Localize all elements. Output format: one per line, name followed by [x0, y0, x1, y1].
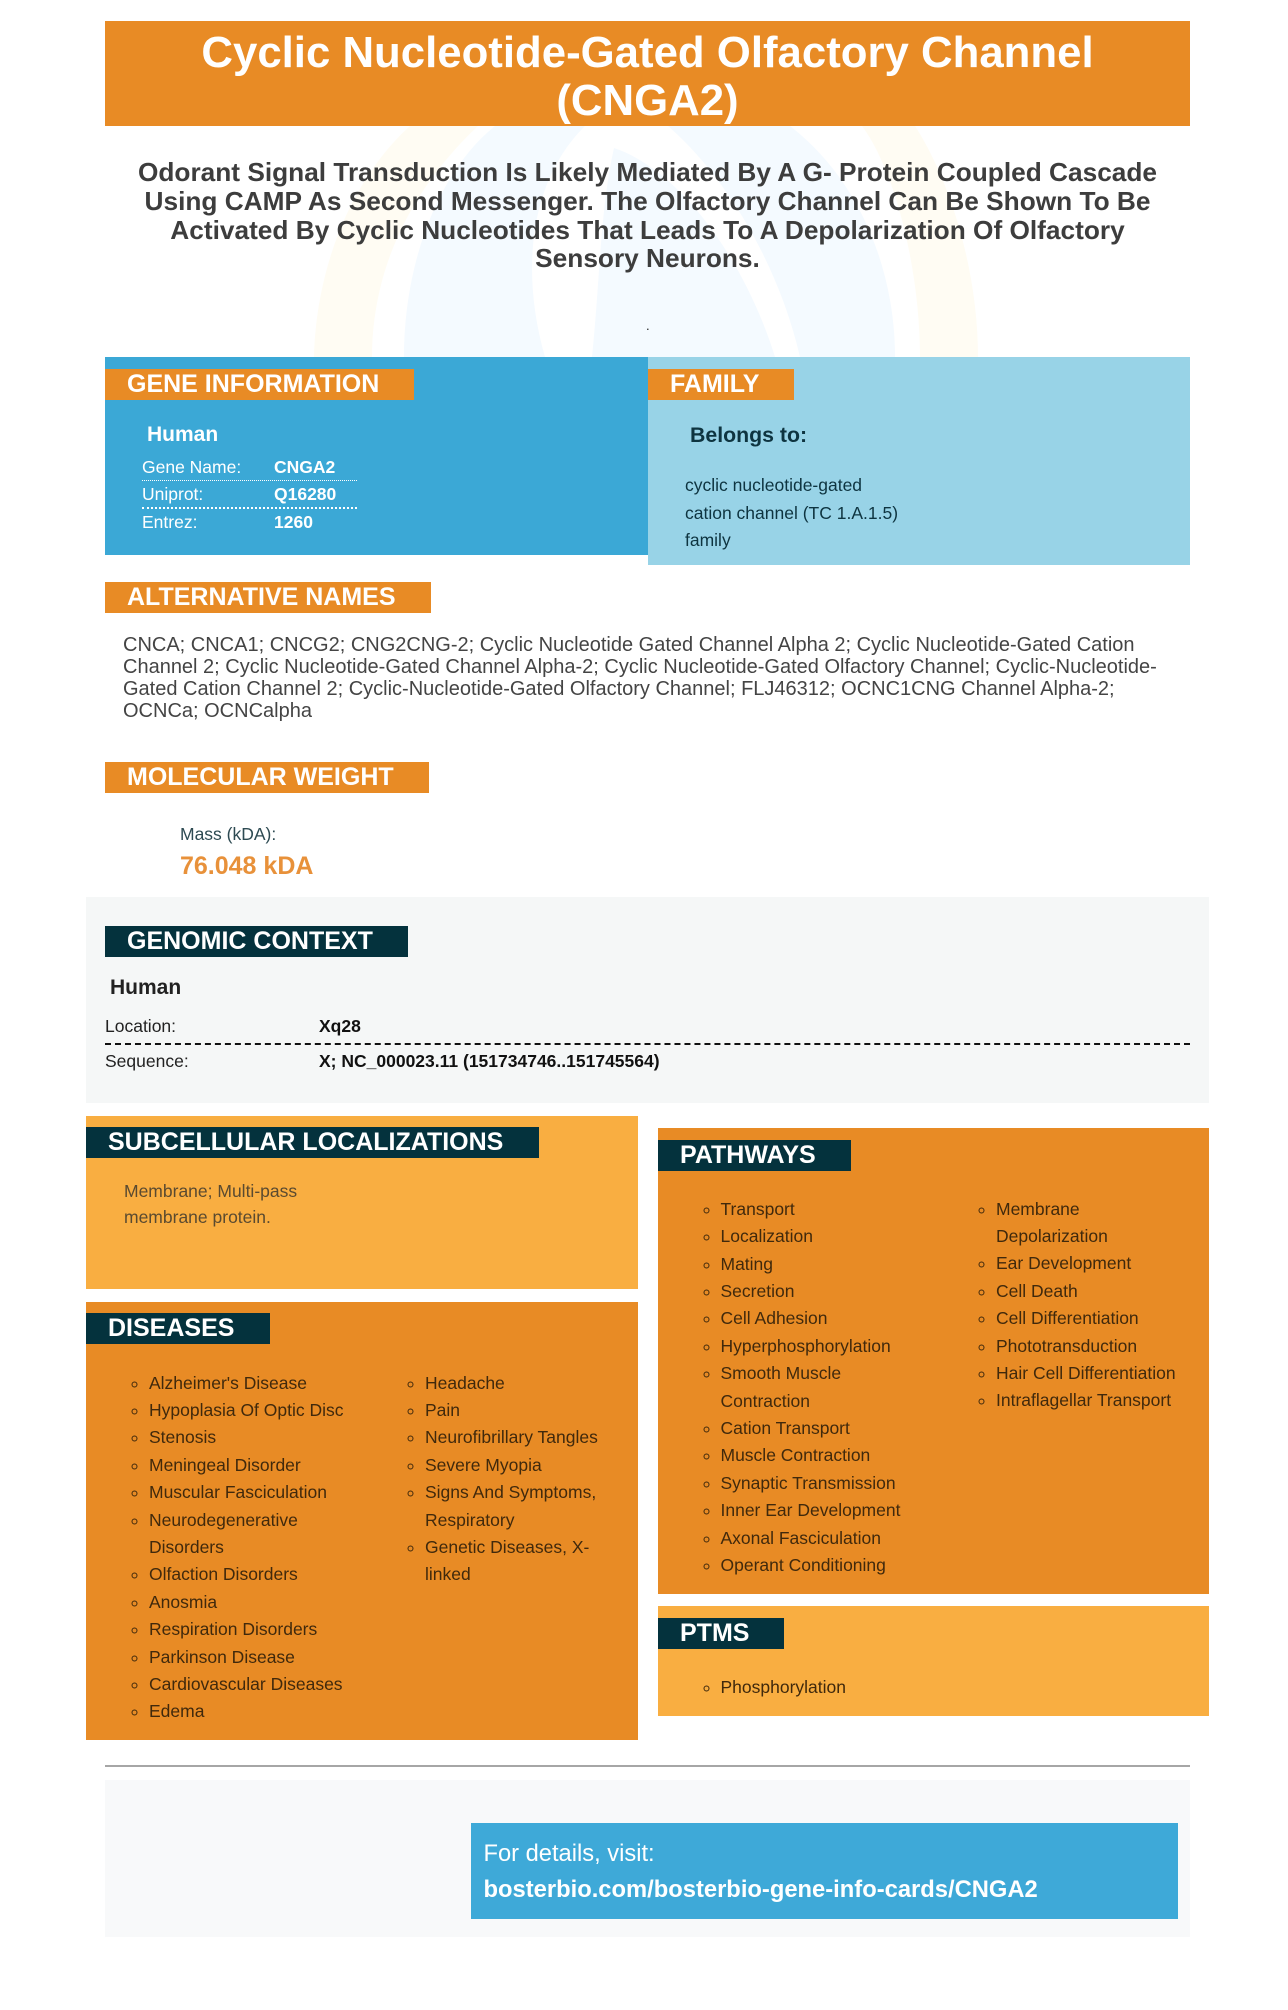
- disease list column 1: Hypoplasia Of Optic Disc: [149, 1400, 344, 1420]
- pathway list column 2: Cell Death: [996, 1281, 1078, 1301]
- panel: diseases: [86, 1302, 638, 1740]
- uniprot row: [142, 483, 357, 509]
- panel: footer: [105, 1780, 1190, 1937]
- family description: cyclic nucleotide-gated: [685, 475, 862, 495]
- alternative names text: OCNCa; OCNCalpha: [123, 700, 312, 722]
- localization text: Membrane; Multi-pass: [124, 1181, 297, 1201]
- pathway list column 1: Cation Transport: [720, 1418, 850, 1438]
- localization text: membrane protein.: [124, 1207, 271, 1227]
- title banner: (CNGA2): [556, 76, 739, 125]
- heading: pathways: PATHWAYS: [680, 1141, 816, 1169]
- subtitle summary: Using CAMP As Second Messenger. The Olfactory Channel Can Be Shown To Be: [145, 186, 1150, 216]
- pathway list column 2: Membrane: [996, 1198, 1080, 1218]
- panel: genomic context: [86, 897, 1209, 1103]
- sequence row: X; NC_000023.11 (151734746..151745564): [319, 1051, 660, 1071]
- footer divider: [105, 1765, 1190, 1767]
- alternative names text: CNCA; CNCA1; CNCG2; CNG2CNG-2; Cyclic Nucleotide Gated Channel Alpha 2; Cyclic Nucleotide-Gated Cation: [123, 634, 1135, 656]
- disease list column 1: Disorders: [149, 1537, 224, 1557]
- sequence row: Sequence:: [105, 1051, 189, 1071]
- pathway list column 1: [704, 1199, 900, 1575]
- subtitle summary: Sensory Neurons.: [535, 243, 760, 273]
- title banner: Cyclic Nucleotide-Gated Olfactory Channel: [201, 28, 1094, 77]
- details label: For details, visit:: [484, 1841, 655, 1867]
- heading: ptms: [658, 1618, 784, 1649]
- disease list column 1: Stenosis: [149, 1427, 216, 1447]
- heading: subcellular localizations: SUBCELLULAR LOCALIZATIONS: [108, 1128, 503, 1156]
- heading: molecular weight: MOLECULAR WEIGHT: [127, 763, 394, 791]
- disease list column 2: linked: [425, 1564, 471, 1584]
- heading: ptms: PTMS: [680, 1619, 749, 1647]
- family description: [685, 475, 898, 550]
- heading: genomic context: GENOMIC CONTEXT: [127, 927, 373, 955]
- alternative names text: Channel 2; Cyclic Nucleotide-Gated Channel Alpha-2; Cyclic Nucleotide-Gated Olfactory Channel; Cyclic-Nucleotide-: [123, 656, 1157, 678]
- alternative names text: Gated Cation Channel 2; Cyclic-Nucleotide-Gated Olfactory Channel; FLJ46312; OCNC1CNG Channel Alpha-2;: [123, 678, 1115, 700]
- family description: cation channel (TC 1.A.1.5): [685, 503, 898, 523]
- ptm list: Phosphorylation: [720, 1677, 846, 1697]
- subtitle summary: [138, 157, 1157, 273]
- subtitle summary: Activated By Cyclic Nucleotides That Leads To A Depolarization Of Olfactory: [170, 215, 1125, 245]
- disease list column 1: Parkinson Disease: [149, 1647, 295, 1667]
- pathway list column 2: Intraflagellar Transport: [996, 1390, 1171, 1410]
- pathway list column 2: Phototransduction: [996, 1336, 1137, 1356]
- pathway list column 1: Cell Adhesion: [720, 1308, 828, 1328]
- heading: diseases: DISEASES: [108, 1314, 234, 1342]
- location row: Location:: [105, 1016, 176, 1036]
- disease list column 1: Neurodegenerative: [149, 1510, 298, 1530]
- panel: pathways: [658, 1128, 1209, 1594]
- family description: family: [685, 530, 731, 550]
- callout: details link: [471, 1823, 1178, 1919]
- mass value: 76.048 kDA: [180, 852, 313, 880]
- gene name row: [142, 456, 357, 481]
- uniprot row: Uniprot:: [142, 484, 203, 504]
- disease list column 2: Respiratory: [425, 1510, 514, 1530]
- heading: alternative names: ALTERNATIVE NAMES: [127, 583, 396, 611]
- disease list column 2: Genetic Diseases, X-: [425, 1537, 589, 1557]
- disease list column 2: [408, 1372, 598, 1584]
- pathway list column 1: Inner Ear Development: [720, 1500, 900, 1520]
- disease list column 1: [132, 1372, 344, 1721]
- heading: gene information: GENE INFORMATION: [127, 370, 379, 398]
- pathway list column 1: Operant Conditioning: [720, 1555, 886, 1575]
- pathway list column 1: Synaptic Transmission: [720, 1473, 896, 1493]
- disease list column 1: Cardiovascular Diseases: [149, 1674, 343, 1694]
- heading: pathways: [658, 1140, 851, 1171]
- disease list column 2: Pain: [425, 1400, 460, 1420]
- disease list column 1: Meningeal Disorder: [149, 1455, 301, 1475]
- localization text: [124, 1181, 297, 1227]
- uniprot row: Q16280: [274, 484, 336, 504]
- dot: .: [646, 318, 650, 333]
- disease list column 2: Severe Myopia: [425, 1455, 542, 1475]
- heading: family: FAMILY: [670, 370, 759, 398]
- pathway list column 1: Mating: [720, 1254, 773, 1274]
- species label: Human: [147, 423, 218, 446]
- subtitle summary: Odorant Signal Transduction Is Likely Mediated By A G- Protein Coupled Cascade: [138, 157, 1157, 187]
- panel: subcellular localizations: [86, 1116, 638, 1289]
- heading: family: [648, 369, 794, 400]
- pathway list column 1: Localization: [720, 1226, 813, 1246]
- pathway list column 1: Secretion: [720, 1281, 794, 1301]
- belongs to label: Belongs to:: [690, 423, 807, 447]
- pathway list column 2: Cell Differentiation: [996, 1308, 1139, 1328]
- disease list column 1: Edema: [149, 1701, 204, 1721]
- disease list column 1: Anosmia: [149, 1592, 217, 1612]
- pathway list column 1: Contraction: [720, 1391, 810, 1411]
- sequence row: [105, 1051, 660, 1071]
- species label: Human: [110, 976, 181, 999]
- disease list column 1: Alzheimer's Disease: [149, 1372, 307, 1392]
- pathway list column 1: Muscle Contraction: [720, 1445, 870, 1465]
- disease list column 1: Olfaction Disorders: [149, 1564, 298, 1584]
- pathway list column 2: [978, 1198, 1176, 1410]
- mass label: Mass (kDA):: [180, 824, 276, 844]
- pathway list column 1: Axonal Fasciculation: [720, 1528, 881, 1548]
- pathway list column 1: Transport: [720, 1199, 795, 1219]
- panel: family: [648, 357, 1190, 565]
- title banner: [105, 21, 1190, 126]
- alternative names text: [123, 634, 1157, 722]
- disease list column 2: Headache: [425, 1372, 505, 1392]
- gene name row: CNGA2: [274, 457, 335, 477]
- pathway list column 1: Hyperphosphorylation: [720, 1336, 891, 1356]
- heading: diseases: [86, 1313, 270, 1344]
- disease list column 1: Muscular Fasciculation: [149, 1482, 327, 1502]
- disease list column 1: Respiration Disorders: [149, 1619, 317, 1639]
- details url: bosterbio.com/bosterbio-gene-info-cards/CNGA2: [484, 1876, 1038, 1903]
- entrez row: [142, 512, 313, 532]
- pathway list column 2: Hair Cell Differentiation: [996, 1363, 1176, 1383]
- panel: ptms: [658, 1606, 1209, 1716]
- panel: gene information: [105, 357, 648, 555]
- gene name row: Gene Name:: [142, 457, 241, 477]
- pathway list column 2: Ear Development: [996, 1253, 1131, 1273]
- disease list column 2: Signs And Symptoms,: [425, 1482, 596, 1502]
- location row: Xq28: [319, 1016, 361, 1036]
- pathway list column 1: Smooth Muscle: [720, 1363, 841, 1383]
- location row: [105, 1015, 1190, 1045]
- pathway list column 2: Depolarization: [996, 1226, 1108, 1246]
- entrez row: 1260: [274, 512, 313, 532]
- disease list column 2: Neurofibrillary Tangles: [425, 1427, 598, 1447]
- entrez row: Entrez:: [142, 512, 197, 532]
